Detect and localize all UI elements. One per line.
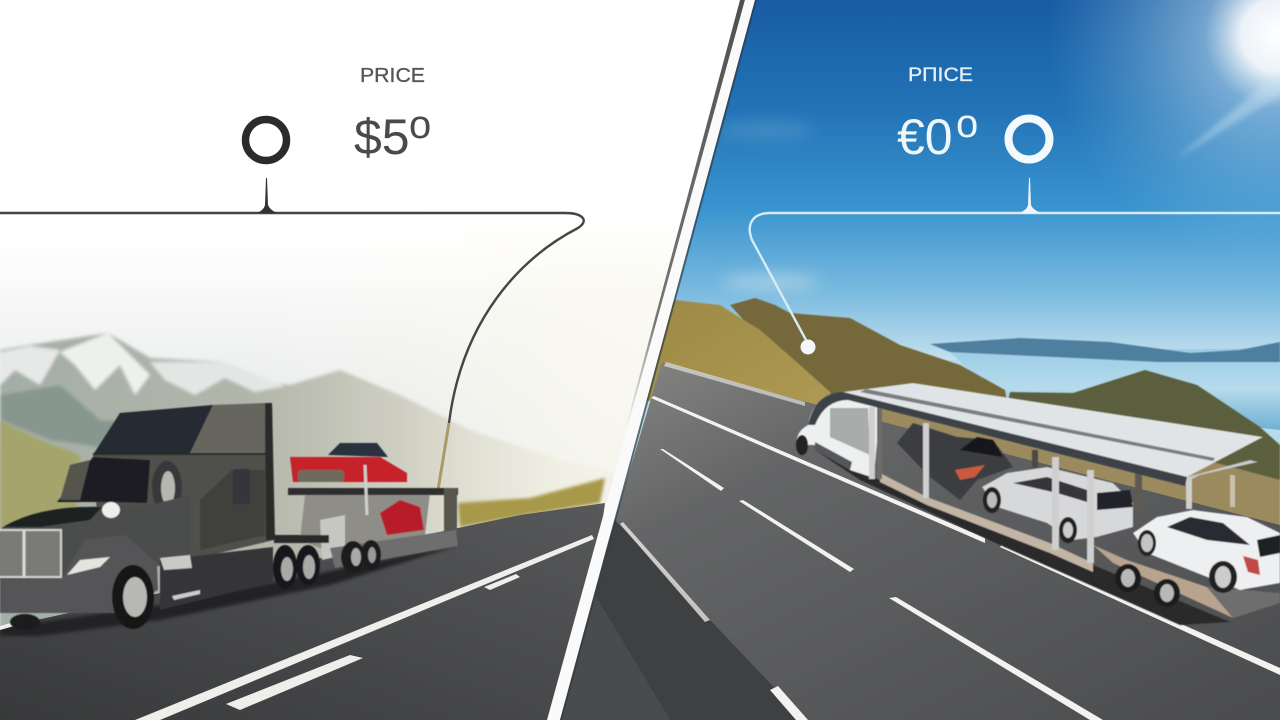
left haze overlay bbox=[318, 348, 646, 534]
carrier wheels bbox=[1115, 564, 1180, 607]
truck wheels bbox=[10, 545, 320, 630]
white cab bbox=[797, 393, 880, 478]
canopy roof bbox=[843, 383, 1263, 477]
right price value: €0 bbox=[897, 109, 953, 165]
top fade of haze bbox=[501, 205, 685, 231]
trailer with red cars bbox=[288, 443, 458, 573]
right price block bbox=[897, 65, 1050, 213]
white truck with covered car carrier bbox=[796, 383, 1280, 625]
left pin stem bbox=[257, 178, 277, 213]
truck bumper and fender bbox=[0, 535, 158, 613]
right sky bbox=[673, 0, 1280, 360]
carrier shadow and deck bbox=[815, 450, 1230, 625]
right road bbox=[555, 362, 1280, 720]
truck sleeper cab bbox=[93, 403, 274, 560]
sea of mist bbox=[950, 348, 1280, 430]
left price block bbox=[246, 65, 431, 213]
lamp pole continuing connector bbox=[438, 423, 449, 490]
curved connector line: right bbox=[750, 213, 1280, 340]
thin clouds bbox=[715, 122, 815, 138]
left price value: o bbox=[409, 103, 431, 147]
left foreground hill bbox=[0, 420, 80, 530]
right price label: PΠICE bbox=[908, 65, 973, 86]
sun glow bbox=[1069, 0, 1280, 232]
left panel: lower-cost scene bbox=[0, 212, 668, 720]
left ring marker bbox=[246, 120, 286, 160]
truck grille bbox=[0, 530, 61, 577]
truck hood bbox=[0, 498, 180, 581]
left road markings bbox=[0, 535, 594, 720]
silver car bbox=[982, 467, 1133, 543]
right pin stem bbox=[1019, 178, 1041, 213]
dark outer edge bbox=[560, 0, 757, 720]
truck windshield bbox=[57, 457, 150, 503]
dark truck and car carrier bbox=[0, 403, 458, 630]
sun rays bbox=[1181, 86, 1280, 156]
road dark corner bbox=[555, 595, 670, 720]
right hills bbox=[640, 298, 1280, 530]
connector end dot bbox=[800, 340, 816, 354]
thin dark inner rule bbox=[625, 0, 745, 430]
curved connector line: left bbox=[0, 213, 584, 423]
distant blue range bbox=[930, 338, 1280, 362]
left snowy mountains bbox=[0, 333, 615, 640]
truck road shadow bbox=[0, 545, 460, 636]
sky backing below horizon bbox=[608, 360, 1280, 544]
left road bbox=[0, 503, 605, 720]
white car bbox=[1133, 510, 1280, 593]
right road markings bbox=[620, 362, 1280, 720]
truck fuel tank and steps bbox=[160, 547, 273, 610]
white band bbox=[547, 0, 755, 720]
right price value: o bbox=[956, 102, 978, 146]
dark car on carrier bbox=[897, 423, 1013, 500]
right ring marker bbox=[1008, 118, 1050, 160]
left grass bank bbox=[458, 478, 605, 527]
left sky haze bbox=[0, 296, 537, 626]
right panel: premium scene bbox=[550, 0, 1280, 720]
road dark lower strip bbox=[595, 520, 805, 720]
left price label: PRICE bbox=[360, 65, 425, 87]
left price value: $5 bbox=[354, 109, 410, 165]
diagonal divider band bbox=[547, 0, 757, 720]
canopy support posts bbox=[869, 407, 1235, 563]
